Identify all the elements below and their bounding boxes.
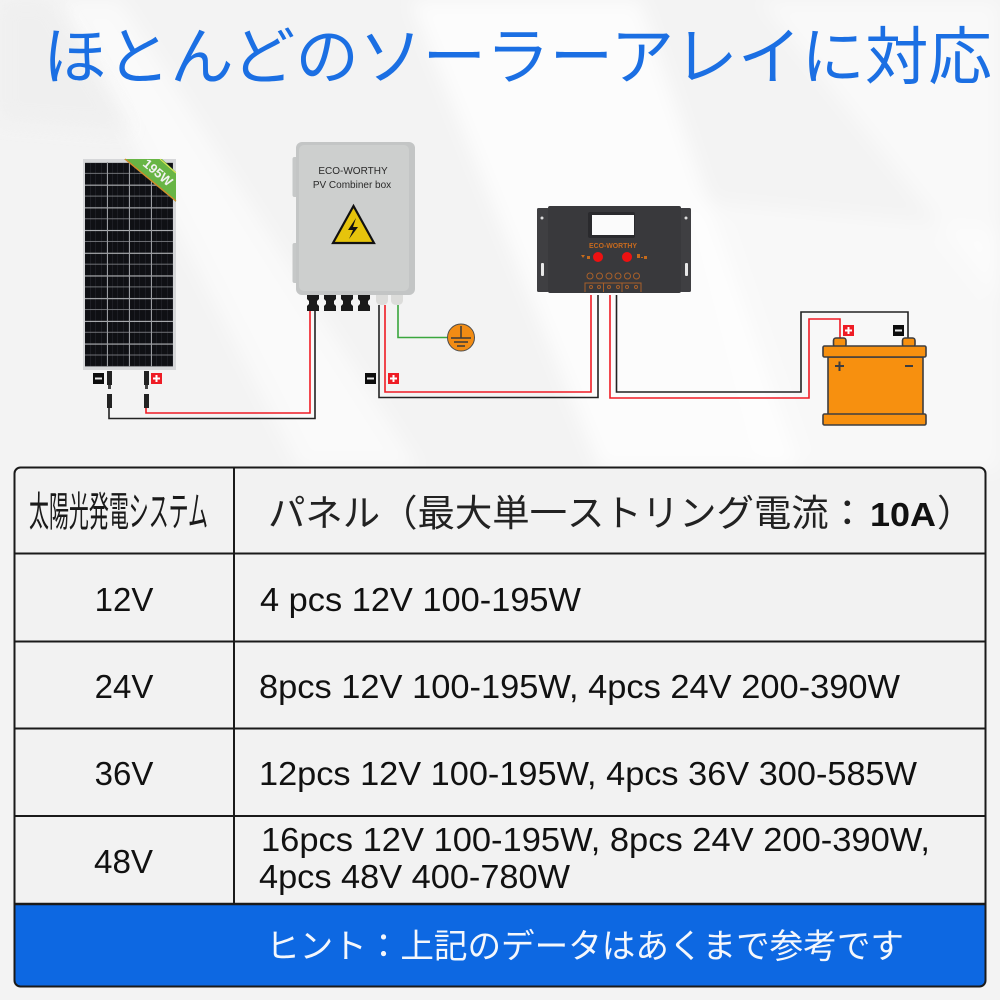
row: 24V: 24V [95,668,153,705]
row: 48V [94,821,930,895]
controller terminals [585,273,641,292]
solar panel [83,156,176,370]
row: 48V: 16pcs 12V 100-195W, 8pcs 24V 200-390W, [261,821,930,858]
combiner label: ECO-WORTHY [318,166,388,177]
ground wire and icon [398,305,474,351]
row: 12V [95,581,582,618]
wires: combiner to controller [379,295,598,398]
wires: panel to combiner box [109,310,315,418]
title: ほとんどのソーラーアレイに対応 [43,23,992,93]
row: 24V: 8pcs 12V 100-195W, 4pcs 24V 200-390W [259,668,901,705]
controller screen [588,212,635,238]
icon: battery [823,338,926,425]
table header: panels: パネル（最大単一ストリング電流： [268,493,866,534]
battery negative badge [893,325,904,336]
row: 48V: 4pcs 48V 400-780W [259,858,571,895]
row: 36V: 12pcs 12V 100-195W, 4pcs 36V 300-585W [259,755,918,792]
table header: panels: ） [937,493,974,534]
charge controller [537,206,691,293]
combiner box [292,142,415,295]
panel MC4 connectors [107,371,149,408]
controller brand: ECO-WORTHY [589,241,637,250]
tip banner [14,905,986,987]
combiner output positive badge [388,373,399,384]
table body [14,468,986,986]
controller buttons [581,252,647,262]
table header: panels: 10A [870,496,936,533]
row: 48V: 48V [94,843,153,880]
panel wattage badge: 195W [140,156,176,190]
combiner connectors [307,295,403,311]
wires: controller to battery [610,295,908,398]
row: 12V: 4 pcs 12V 100-195W [260,581,582,618]
panel positive badge [151,373,162,384]
combiner output negative badge [365,373,376,384]
tip banner: ヒント：上記のデータはあくまで参考です [266,928,904,966]
panel negative badge [93,373,104,384]
wiring diagram [83,142,926,425]
row: 36V: 36V [95,755,153,792]
battery positive badge [843,325,854,336]
table [14,468,986,987]
table: 太陽光発電システム [29,489,208,535]
row: 12V: 12V [95,581,153,618]
icon: high voltage warning [333,206,374,243]
combiner sublabel: PV Combiner box [313,180,391,191]
